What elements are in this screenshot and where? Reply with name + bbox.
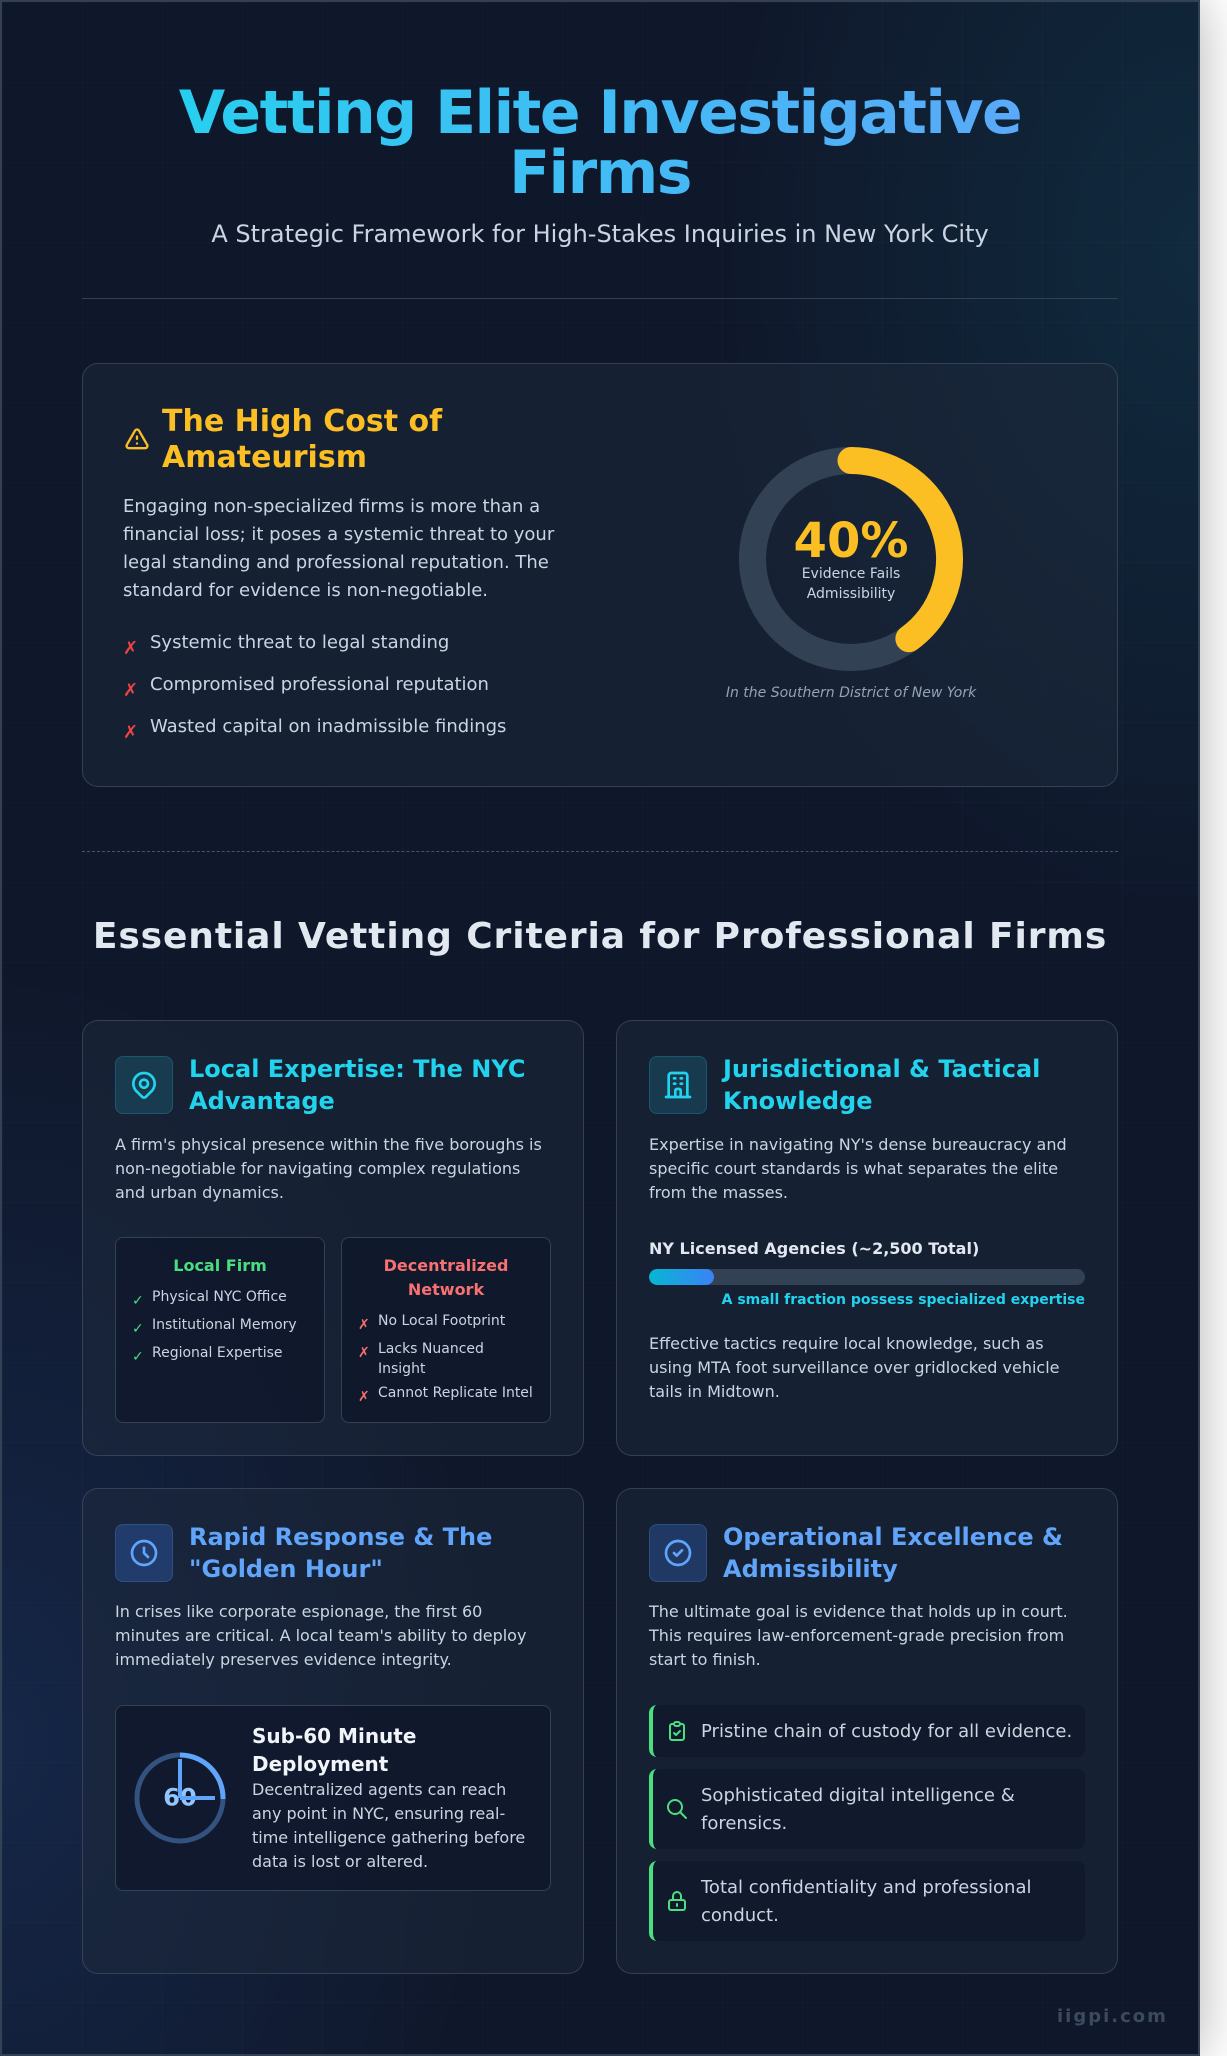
heading: local expertise: [189, 1055, 525, 1115]
gauge: 60 minute dial: [134, 1752, 226, 1844]
icon: check circle: [649, 1524, 707, 1582]
text: cost description: legal standing and professional reputation. The: [123, 552, 549, 573]
subtitle: A Strategic Framework for High-Stakes Inquiries in New York City: [211, 220, 989, 248]
item: chain of custody: [649, 1705, 1085, 1757]
panel: jurisdictional knowledge: [616, 1020, 1118, 1456]
callout text: Decentralized agents can reach: [252, 1780, 506, 1799]
heading: local expertise: Advantage: [189, 1087, 335, 1115]
text: rapid response: immediately preserves evidence integrity.: [115, 1650, 452, 1669]
section heading: Essential Vetting Criteria for Professional Firms: [93, 916, 1107, 957]
label: decentralized network: Decentralized: [384, 1256, 508, 1275]
icon: building: [649, 1056, 707, 1114]
icon: warning triangle: [125, 428, 149, 450]
text: rapid response: minutes are critical. A local team's ability to deploy: [115, 1626, 526, 1645]
bar label: NY Licensed Agencies (~2,500 Total): [649, 1239, 979, 1258]
callout text: data is lost or altered.: [252, 1852, 428, 1871]
heading: rapid response: [189, 1523, 492, 1583]
text: tactics: Effective tactics require local knowledge, such as: [649, 1334, 1044, 1353]
cross: insight: ✗: [358, 1345, 370, 1361]
donut chart: 40 percent: [739, 447, 963, 671]
stat: 40%: 40%: [794, 513, 908, 569]
comparison: local firm: Physical NYC Office: [152, 1289, 287, 1305]
deployment callout: [115, 1705, 551, 1891]
callout heading: Sub-60 Minute: [252, 1724, 416, 1748]
item: confidentiality: conduct.: [701, 1905, 779, 1926]
text: rapid response: [115, 1602, 526, 1669]
bar caption: A small fraction possess specialized expertise: [722, 1292, 1085, 1308]
heading: rapid response: Rapid Response & The: [189, 1523, 492, 1551]
comparison: decentralized network: Insight: [378, 1361, 425, 1377]
icon: clock: [115, 1524, 173, 1582]
panel: local expertise: [82, 1020, 584, 1456]
item: digital forensics: Sophisticated digital intelligence &: [701, 1785, 1015, 1806]
item: confidentiality: Total confidentiality and professional: [701, 1877, 1032, 1898]
item: legal standing: ✗: [123, 638, 138, 659]
text: cost description: financial loss; it poses a systemic threat to your: [123, 524, 554, 545]
gauge: 60 minute dial: 60: [163, 1784, 197, 1812]
callout text: [252, 1780, 525, 1871]
item: wasted capital: ✗: [123, 722, 138, 743]
text: tactics: [649, 1334, 1060, 1401]
item: digital forensics: [649, 1769, 1085, 1849]
text: operational excellence: [648, 1602, 1068, 1669]
title: Vetting Elite Investigative: [179, 78, 1021, 148]
list: threats: [123, 632, 506, 743]
item: confidentiality: [649, 1861, 1085, 1941]
heading: jurisdictional: Knowledge: [723, 1087, 872, 1115]
list: threats: Systemic threat to legal standing: [150, 632, 449, 653]
text: jurisdictional: specific court standards is what separates the elite: [649, 1159, 1058, 1178]
text: local expertise: non-negotiable for navigating complex regulations: [115, 1159, 520, 1178]
label: decentralized network: Network: [408, 1280, 484, 1299]
text: tactics: tails in Midtown.: [649, 1382, 780, 1401]
text: operational excellence: The ultimate goal is evidence that holds up in court.: [649, 1602, 1068, 1621]
chart caption: In the Southern District of New York: [726, 685, 976, 701]
panel: rapid response: [82, 1488, 584, 1974]
heading: operational excellence: Operational Excellence &: [723, 1523, 1063, 1551]
icon: location pin: [115, 1056, 173, 1114]
text: local expertise: A firm's physical presence within the five boroughs is: [115, 1135, 542, 1154]
heading: jurisdictional: [722, 1055, 1040, 1115]
text: cost description: standard for evidence is non-negotiable.: [123, 580, 488, 601]
title: Firms: [509, 138, 691, 208]
text: tactics: using MTA foot surveillance over gridlocked vehicle: [649, 1358, 1060, 1377]
callout text: any point in NYC, ensuring real-: [252, 1804, 505, 1823]
cross: intel: ✗: [358, 1389, 370, 1405]
text: jurisdictional: [649, 1135, 1067, 1202]
check: memory: ✓: [132, 1321, 144, 1337]
text: jurisdictional: from the masses.: [649, 1183, 788, 1202]
comparison: decentralized network: Lacks Nuanced: [378, 1341, 484, 1357]
cross: footprint: ✗: [358, 1317, 370, 1333]
list: threats: Compromised professional reputation: [150, 674, 489, 695]
bar fill: [649, 1269, 714, 1285]
callout text: time intelligence gathering before: [252, 1828, 525, 1847]
icon: clipboard check: [669, 1721, 685, 1741]
heading: operational excellence: [723, 1523, 1063, 1583]
progress bar: [649, 1269, 1085, 1285]
label: local firm: Local Firm: [173, 1256, 267, 1275]
list: threats: Wasted capital on inadmissible findings: [150, 716, 506, 737]
check: regional: ✓: [132, 1349, 144, 1365]
comparison: decentralized network: Cannot Replicate Intel: [378, 1385, 533, 1401]
comparison: local firm: Institutional Memory: [152, 1317, 297, 1333]
text: local expertise: and urban dynamics.: [115, 1183, 284, 1202]
callout heading: [252, 1724, 416, 1776]
comparison: local firm: [115, 1237, 325, 1423]
title: [82, 83, 1118, 203]
label: decentralized network: [384, 1256, 508, 1299]
icon: magnifier: [667, 1799, 687, 1819]
text: operational excellence: start to finish.: [649, 1650, 761, 1669]
heading: high cost: The High Cost of: [162, 404, 442, 439]
item: reputation: ✗: [123, 680, 138, 701]
comparison: decentralized network: No Local Footprint: [378, 1313, 505, 1329]
text: local expertise: [115, 1135, 542, 1202]
heading: rapid response: "Golden Hour": [189, 1555, 383, 1583]
text: cost description: [123, 496, 554, 601]
text: operational excellence: This requires law-enforcement-grade precision from: [649, 1626, 1064, 1645]
heading: local expertise: Local Expertise: The NYC: [189, 1055, 525, 1083]
callout heading: Deployment: [252, 1752, 388, 1776]
item: chain of custody: Pristine chain of custody for all evidence.: [701, 1721, 1072, 1742]
heading: high cost: Amateurism: [162, 440, 367, 475]
check: office: ✓: [132, 1293, 144, 1309]
text: jurisdictional: Expertise in navigating NY's dense bureaucracy and: [649, 1135, 1067, 1154]
heading: high cost: [162, 404, 442, 475]
stat label: Evidence Fails: [802, 566, 900, 582]
icon: lock: [668, 1891, 686, 1911]
text: rapid response: In crises like corporate espionage, the first 60: [115, 1602, 482, 1621]
watermark: iigpi.com: [1057, 2006, 1168, 2027]
heading: jurisdictional: Jurisdictional & Tactical: [723, 1055, 1040, 1083]
stat label: [802, 566, 900, 602]
heading: operational excellence: Admissibility: [723, 1555, 898, 1583]
comparison: local firm: Regional Expertise: [152, 1345, 283, 1361]
item: digital forensics: forensics.: [701, 1813, 787, 1834]
text: cost description: Engaging non-specialized firms is more than a: [123, 496, 540, 517]
comparison: decentralized network: [341, 1237, 551, 1423]
stat label: Admissibility: [807, 586, 895, 602]
panel: the high cost of amateurism: [82, 363, 1118, 787]
panel: operational excellence: [616, 1488, 1118, 1974]
